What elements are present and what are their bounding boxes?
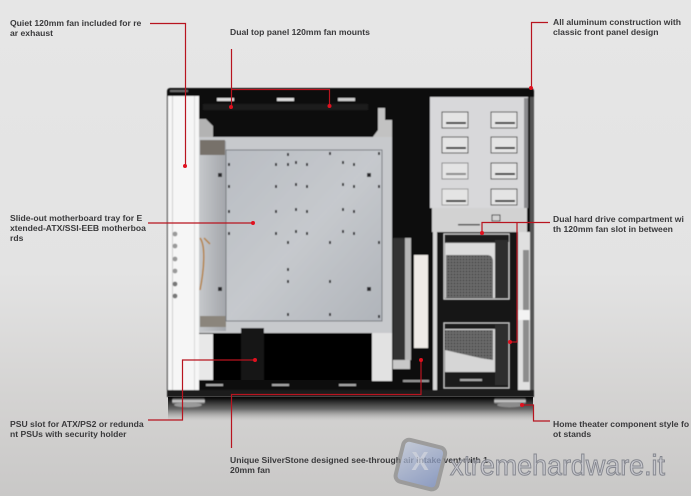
label: rear fan: ar exhaust	[10, 28, 53, 38]
top bracket	[200, 140, 225, 155]
black middle column	[392, 96, 430, 238]
label: intake vent: 20mm fan	[230, 465, 270, 475]
leader: top fan mounts	[229, 49, 332, 109]
bottom base	[167, 390, 534, 397]
label: top fan mounts: Dual top panel 120mm fan mounts	[230, 27, 370, 37]
watermark logo: X	[411, 446, 429, 476]
hard drive compartment	[437, 232, 518, 391]
label: aluminum construction: All aluminum construction with	[553, 17, 681, 27]
motherboard tray	[226, 150, 382, 321]
leader: foot stands	[520, 403, 550, 421]
label: foot stands: Home theater component style fo	[553, 419, 689, 429]
label: aluminum construction: classic front panel design	[553, 27, 659, 37]
cables	[200, 238, 210, 290]
leader: PSU slot	[148, 358, 257, 420]
label: hard drive compartment: Dual hard drive compartment wi	[553, 214, 684, 224]
label: motherboard tray: Slide-out motherboard tray for E	[10, 213, 142, 223]
leader: motherboard tray	[148, 221, 255, 225]
watermark text: xtremehardware.it	[450, 450, 665, 482]
label: rear fan: Quiet 120mm fan included for re	[10, 18, 141, 28]
chassis photo	[167, 88, 534, 408]
label: foot stands: ot stands	[553, 429, 591, 439]
intake vent	[392, 232, 438, 390]
bottom bracket	[200, 316, 226, 327]
tray holes	[218, 152, 380, 318]
drive cage	[430, 97, 528, 232]
upper bay	[444, 234, 509, 299]
PSU bay	[199, 328, 392, 386]
watermark logo	[394, 439, 446, 491]
floor shadow	[168, 397, 533, 421]
foot: right	[494, 398, 526, 408]
top fan bay	[199, 96, 392, 138]
rear white panel	[168, 96, 199, 390]
label: motherboard tray: rds	[10, 233, 24, 243]
leader: hard drive compartment	[480, 222, 550, 344]
label: hard drive compartment: th 120mm fan slot in between	[553, 224, 673, 234]
label: PSU slot: PSU slot for ATX/PS2 or redunda	[10, 419, 144, 429]
tray frame	[199, 137, 392, 333]
label: motherboard tray: xtended-ATX/SSI-EEB motherboa	[10, 223, 146, 233]
right side strip	[518, 97, 534, 395]
label: PSU slot: nt PSUs with security holder	[10, 429, 127, 439]
chassis body	[167, 88, 534, 397]
label: intake vent: Unique SilverStone designed see-through air intake vent with 1	[230, 455, 488, 465]
foot: left	[172, 398, 205, 408]
top edge highlight	[170, 90, 188, 92]
leader: rear fan	[150, 24, 187, 168]
leader: aluminum construction	[529, 22, 548, 90]
leader: intake vent	[232, 358, 423, 448]
tray left wall	[199, 141, 226, 331]
lower bay	[444, 323, 509, 388]
